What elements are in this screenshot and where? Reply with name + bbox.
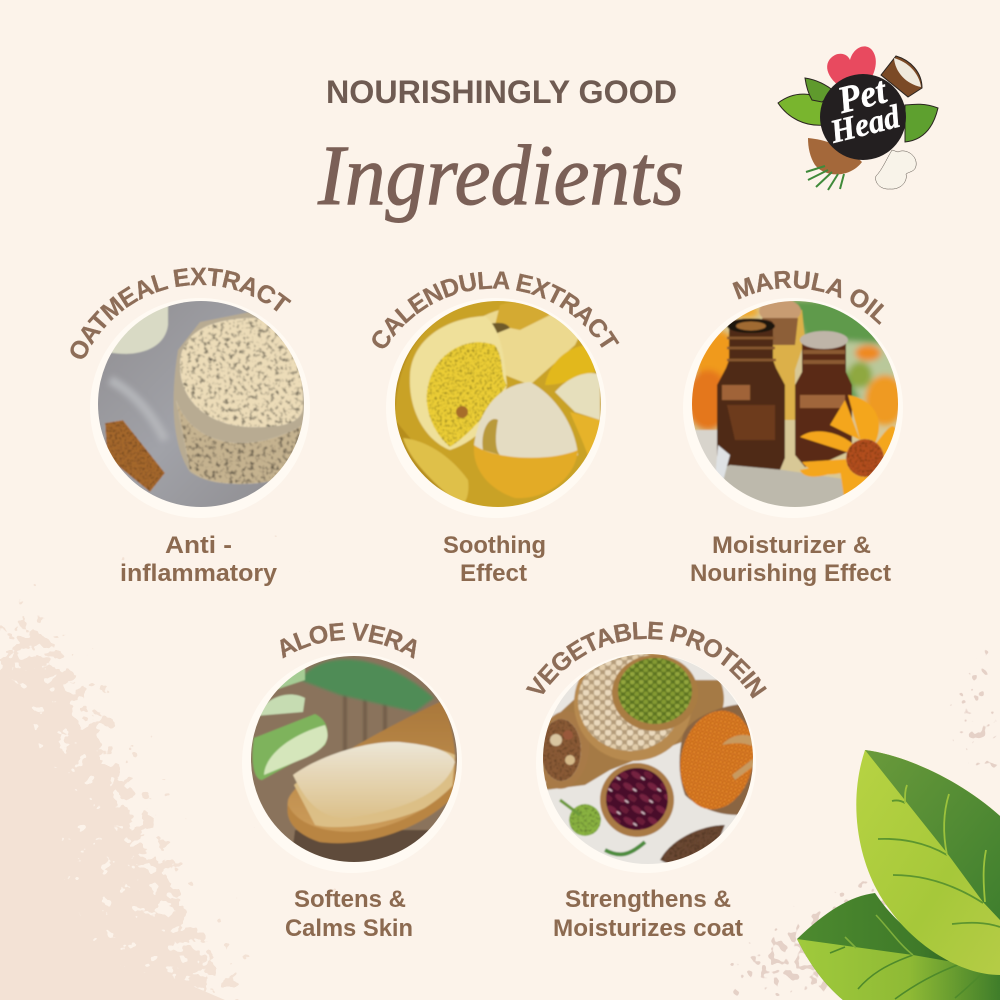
photo: yellow fruit: [395, 301, 601, 507]
caption: strengthens and moisturizes coat: Moisturizes coat: [553, 915, 743, 942]
photo: pulses in wooden bowls: [543, 654, 753, 864]
photo ring: [536, 653, 756, 873]
panel: vegetable protein: [526, 622, 767, 873]
curved label: CALENDULA EXTRACT: [372, 271, 620, 348]
logo wordmark: Pet: [833, 69, 892, 122]
caption: soothing effect: [443, 532, 546, 587]
panel: aloe vera: [242, 622, 462, 873]
caption: strengthens and moisturizes coat: Strengthens &: [565, 886, 731, 913]
background splatter: right: [700, 590, 1000, 1000]
photo ring: [683, 298, 903, 518]
logo wordmark: [818, 68, 904, 151]
curved label: ALOE VERA: [280, 622, 417, 659]
logo heart: [827, 46, 876, 90]
background splatter: left: [0, 590, 260, 1000]
logo leaf right: [905, 104, 938, 142]
caption: moisturizer and nourishing effect: [690, 532, 891, 587]
caption: softens and calms skin: Softens &: [294, 886, 406, 913]
leaf: front: [856, 750, 1000, 975]
curved label: VEGETABLE PROTEIN: [526, 622, 767, 699]
caption: softens and calms skin: [285, 886, 413, 942]
heading: nourishingly good: NOURISHINGLY GOOD: [326, 74, 677, 110]
caption: softens and calms skin: Calms Skin: [285, 915, 413, 942]
curved label: MARULA OIL: [732, 270, 884, 325]
logo leaf upper: [805, 78, 835, 102]
caption: anti-inflammatory: [120, 532, 278, 587]
photo: oats in a jar: [98, 301, 304, 507]
logo leaf left: [778, 94, 828, 125]
caption: soothing effect: Effect: [460, 560, 527, 587]
caption: strengthens and moisturizes coat: [553, 886, 743, 942]
logo coconut bottom: [808, 138, 862, 174]
photo: aloe gel on a spoon: [251, 656, 457, 862]
photo ring: [242, 653, 462, 873]
curved label: OATMEAL EXTRACT: [70, 268, 292, 359]
caption: anti-inflammatory: Anti -: [165, 532, 232, 559]
panel: oatmeal extract: [70, 268, 310, 518]
caption: soothing effect: Soothing: [443, 532, 546, 559]
leaf: back: [797, 893, 1000, 1000]
logo: Pet Head: [778, 46, 938, 190]
caption: moisturizer and nourishing effect: Nourishing Effect: [690, 560, 891, 587]
logo palm fronds: [806, 166, 844, 190]
photo ring: [90, 298, 310, 518]
panel: marula oil: [683, 270, 903, 518]
logo wordmark: Head: [826, 99, 904, 151]
caption: moisturizer and nourishing effect: Moisturizer &: [712, 532, 871, 559]
panel: calendula extract: [372, 271, 620, 518]
caption: anti-inflammatory: inflammatory: [120, 560, 278, 587]
photo ring: [386, 298, 606, 518]
logo black badge: [820, 74, 906, 160]
heading: ingredients script: Ingredients: [317, 127, 684, 223]
logo bone: [876, 150, 916, 189]
photo: amber bottles and flowers: [692, 301, 898, 507]
logo coconut top: [881, 56, 922, 97]
